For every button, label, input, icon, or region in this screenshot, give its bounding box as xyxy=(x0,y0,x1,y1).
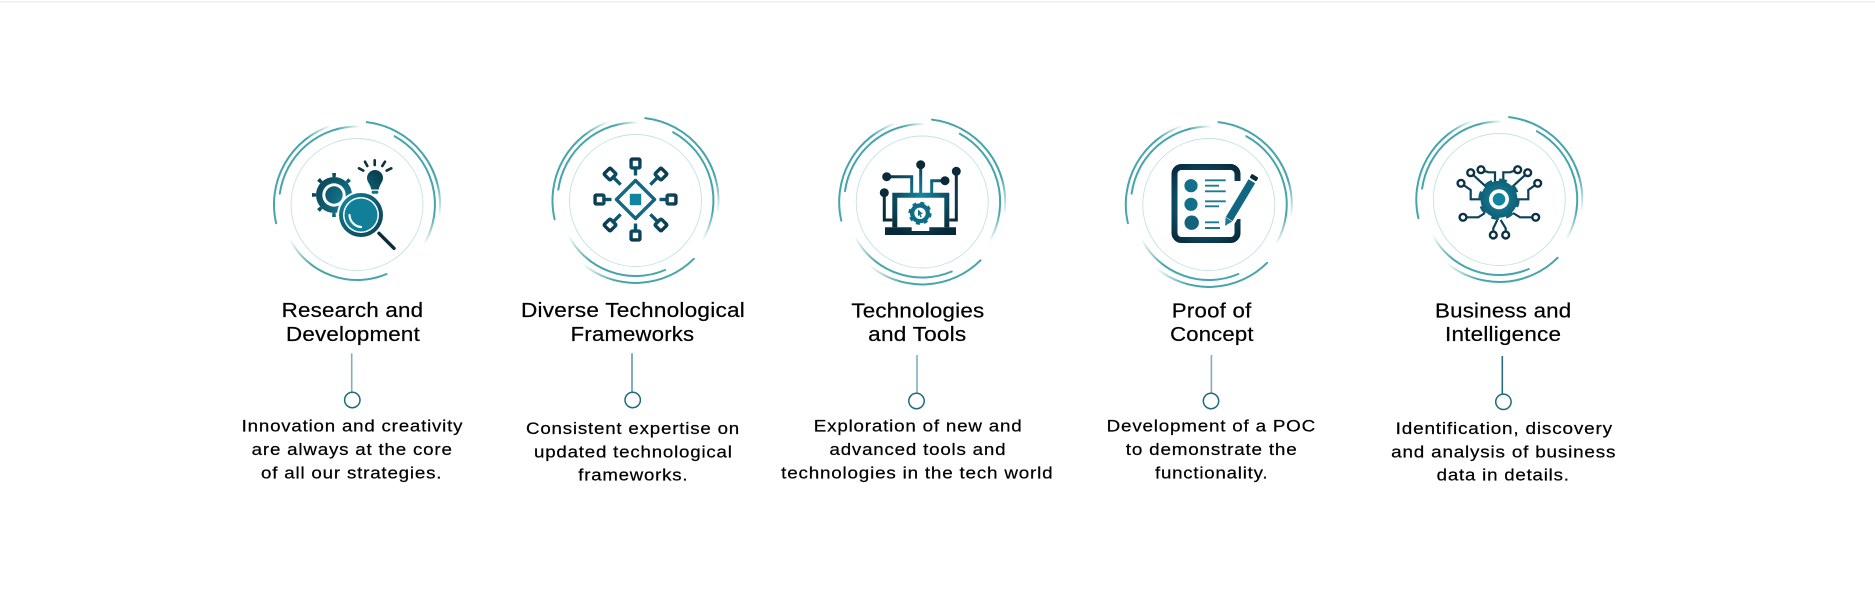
rings: frameworks xyxy=(552,118,719,283)
description: intelligence: and analysis of business xyxy=(1391,443,1616,461)
rings: intelligence xyxy=(1416,117,1582,282)
description: tools xyxy=(781,418,1053,482)
heading: frameworks: Diverse Technological xyxy=(521,300,745,322)
heading: research and development: Research and xyxy=(282,300,423,322)
panel: diverse technological frameworks xyxy=(521,118,745,485)
heading: intelligence xyxy=(1435,300,1571,346)
description: concept: functionality. xyxy=(1155,464,1268,482)
description: research: Innovation and creativity xyxy=(242,418,463,436)
rings: research xyxy=(274,122,440,280)
description: intelligence xyxy=(1391,420,1616,485)
heading: intelligence: Intelligence xyxy=(1445,324,1561,346)
heading: concept xyxy=(1170,300,1254,346)
icon: chip network xyxy=(595,159,676,240)
connector: tools xyxy=(909,355,924,409)
icon: checklist and pen xyxy=(1174,167,1261,240)
heading: concept: Concept xyxy=(1170,324,1254,346)
connector: frameworks xyxy=(625,353,640,408)
heading: concept: Proof of xyxy=(1172,300,1252,322)
description: frameworks: frameworks. xyxy=(578,467,688,485)
icon: circuit gear xyxy=(1458,166,1541,238)
description: concept xyxy=(1107,418,1316,482)
description: tools: Exploration of new and xyxy=(814,418,1022,436)
description: research xyxy=(242,418,463,482)
icon: gear, bulb and magnifier xyxy=(314,160,394,248)
heading: frameworks xyxy=(521,300,745,346)
heading: research and development: Development xyxy=(286,324,420,346)
description: research: of all our strategies. xyxy=(261,464,442,482)
description: tools: advanced tools and xyxy=(830,441,1006,459)
panel: technologies and tools xyxy=(781,120,1053,482)
description: frameworks: updated technological xyxy=(534,443,733,461)
top border line xyxy=(0,1,1875,2)
description: frameworks: Consistent expertise on xyxy=(526,420,740,438)
description: frameworks xyxy=(526,420,740,485)
rings: concept xyxy=(1126,122,1292,287)
heading: intelligence: Business and xyxy=(1435,300,1571,322)
description: concept: to demonstrate the xyxy=(1126,441,1298,459)
heading: tools: and Tools xyxy=(868,324,966,346)
icon: laptop with circuit lines xyxy=(880,160,961,235)
connector: research xyxy=(345,353,360,408)
description: research: are always at the core xyxy=(252,441,453,459)
description: intelligence: data in details. xyxy=(1437,467,1570,485)
description: concept: Development of a POC xyxy=(1107,418,1316,436)
heading: tools xyxy=(851,300,984,346)
description: tools: technologies in the tech world xyxy=(781,464,1053,482)
rings: tools xyxy=(839,120,1005,284)
heading: frameworks: Frameworks xyxy=(571,324,694,346)
heading: research and development xyxy=(282,300,423,346)
panel: proof of concept xyxy=(1107,122,1316,482)
heading: tools: Technologies xyxy=(851,300,984,322)
panel: business and intelligence xyxy=(1391,117,1616,485)
description: intelligence: Identification, discovery xyxy=(1396,420,1613,438)
connector: concept xyxy=(1203,355,1219,409)
connector: intelligence xyxy=(1496,356,1511,409)
panel: research and development xyxy=(242,122,463,482)
